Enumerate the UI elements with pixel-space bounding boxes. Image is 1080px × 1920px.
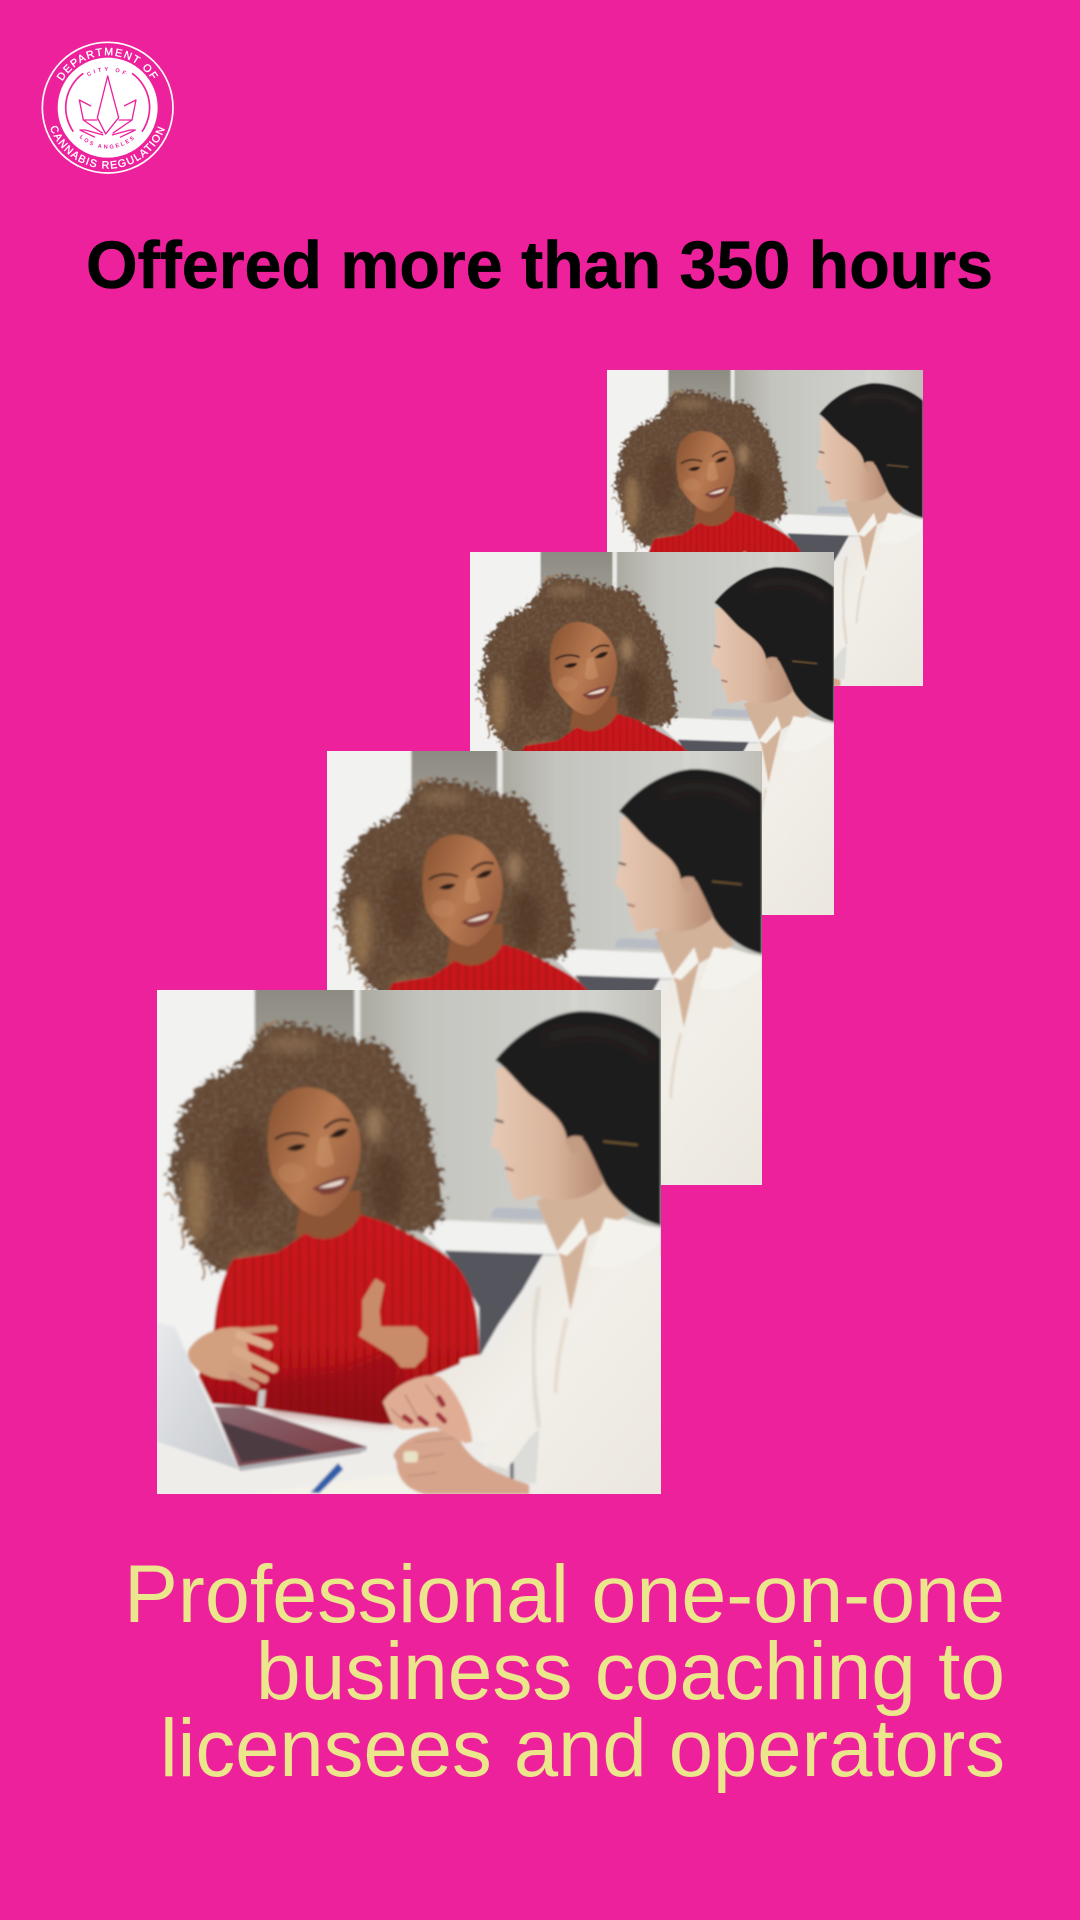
caption line 1: Professional one-on-one <box>124 1549 1005 1640</box>
logo: Department of Cannabis Regulation seal: CANNABIS REGULATION <box>50 126 165 169</box>
caption line 3: licensees and operators <box>160 1703 1005 1794</box>
photo 3 <box>283 713 818 1247</box>
title: Offered more than 350 hours <box>86 228 993 303</box>
logo: Department of Cannabis Regulation seal <box>42 42 174 174</box>
photo 4: largest, front <box>106 946 725 1566</box>
caption line 2: business coaching to <box>256 1626 1005 1717</box>
photo stack <box>106 342 963 1566</box>
logo: Department of Cannabis Regulation seal: DEPARTMENT OF <box>56 48 158 81</box>
caption <box>124 1549 1005 1794</box>
photo 1: smallest, back <box>575 342 963 731</box>
logo: Department of Cannabis Regulation seal: LOS ANGELES <box>80 134 134 149</box>
photo 2 <box>433 520 880 967</box>
logo: Department of Cannabis Regulation seal: CITY OF <box>87 67 126 76</box>
